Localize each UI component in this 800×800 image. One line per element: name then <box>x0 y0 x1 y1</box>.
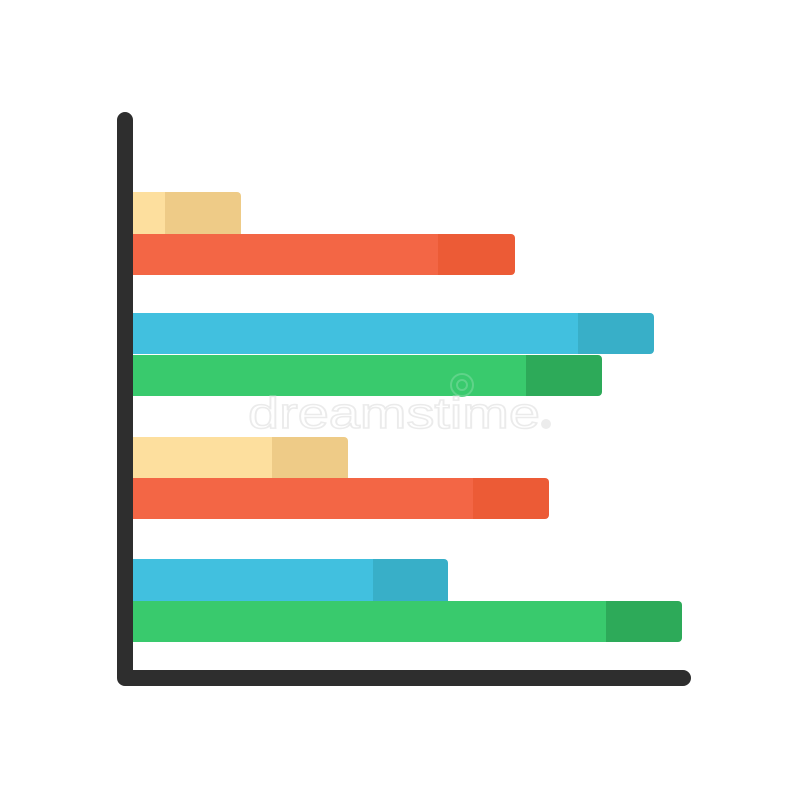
bar: blue 2 <box>133 559 448 601</box>
bar: yellow 1 <box>133 192 241 234</box>
bar group 3 <box>133 437 549 519</box>
bar: red 2 <box>133 478 549 519</box>
watermark logo <box>451 374 473 396</box>
bar: green 1 <box>133 355 602 396</box>
bar: blue 1 <box>133 313 654 354</box>
axes <box>125 120 683 678</box>
bar group 2 <box>133 313 654 396</box>
watermark dot <box>541 419 551 429</box>
bar group 4 <box>133 559 682 642</box>
bar: red 1 <box>133 234 515 275</box>
bar: green 2 <box>133 601 682 642</box>
bar group 1 <box>133 192 515 275</box>
watermark <box>248 374 551 438</box>
watermark text: dreamstime <box>248 389 540 438</box>
bar: yellow 2 <box>133 437 348 478</box>
